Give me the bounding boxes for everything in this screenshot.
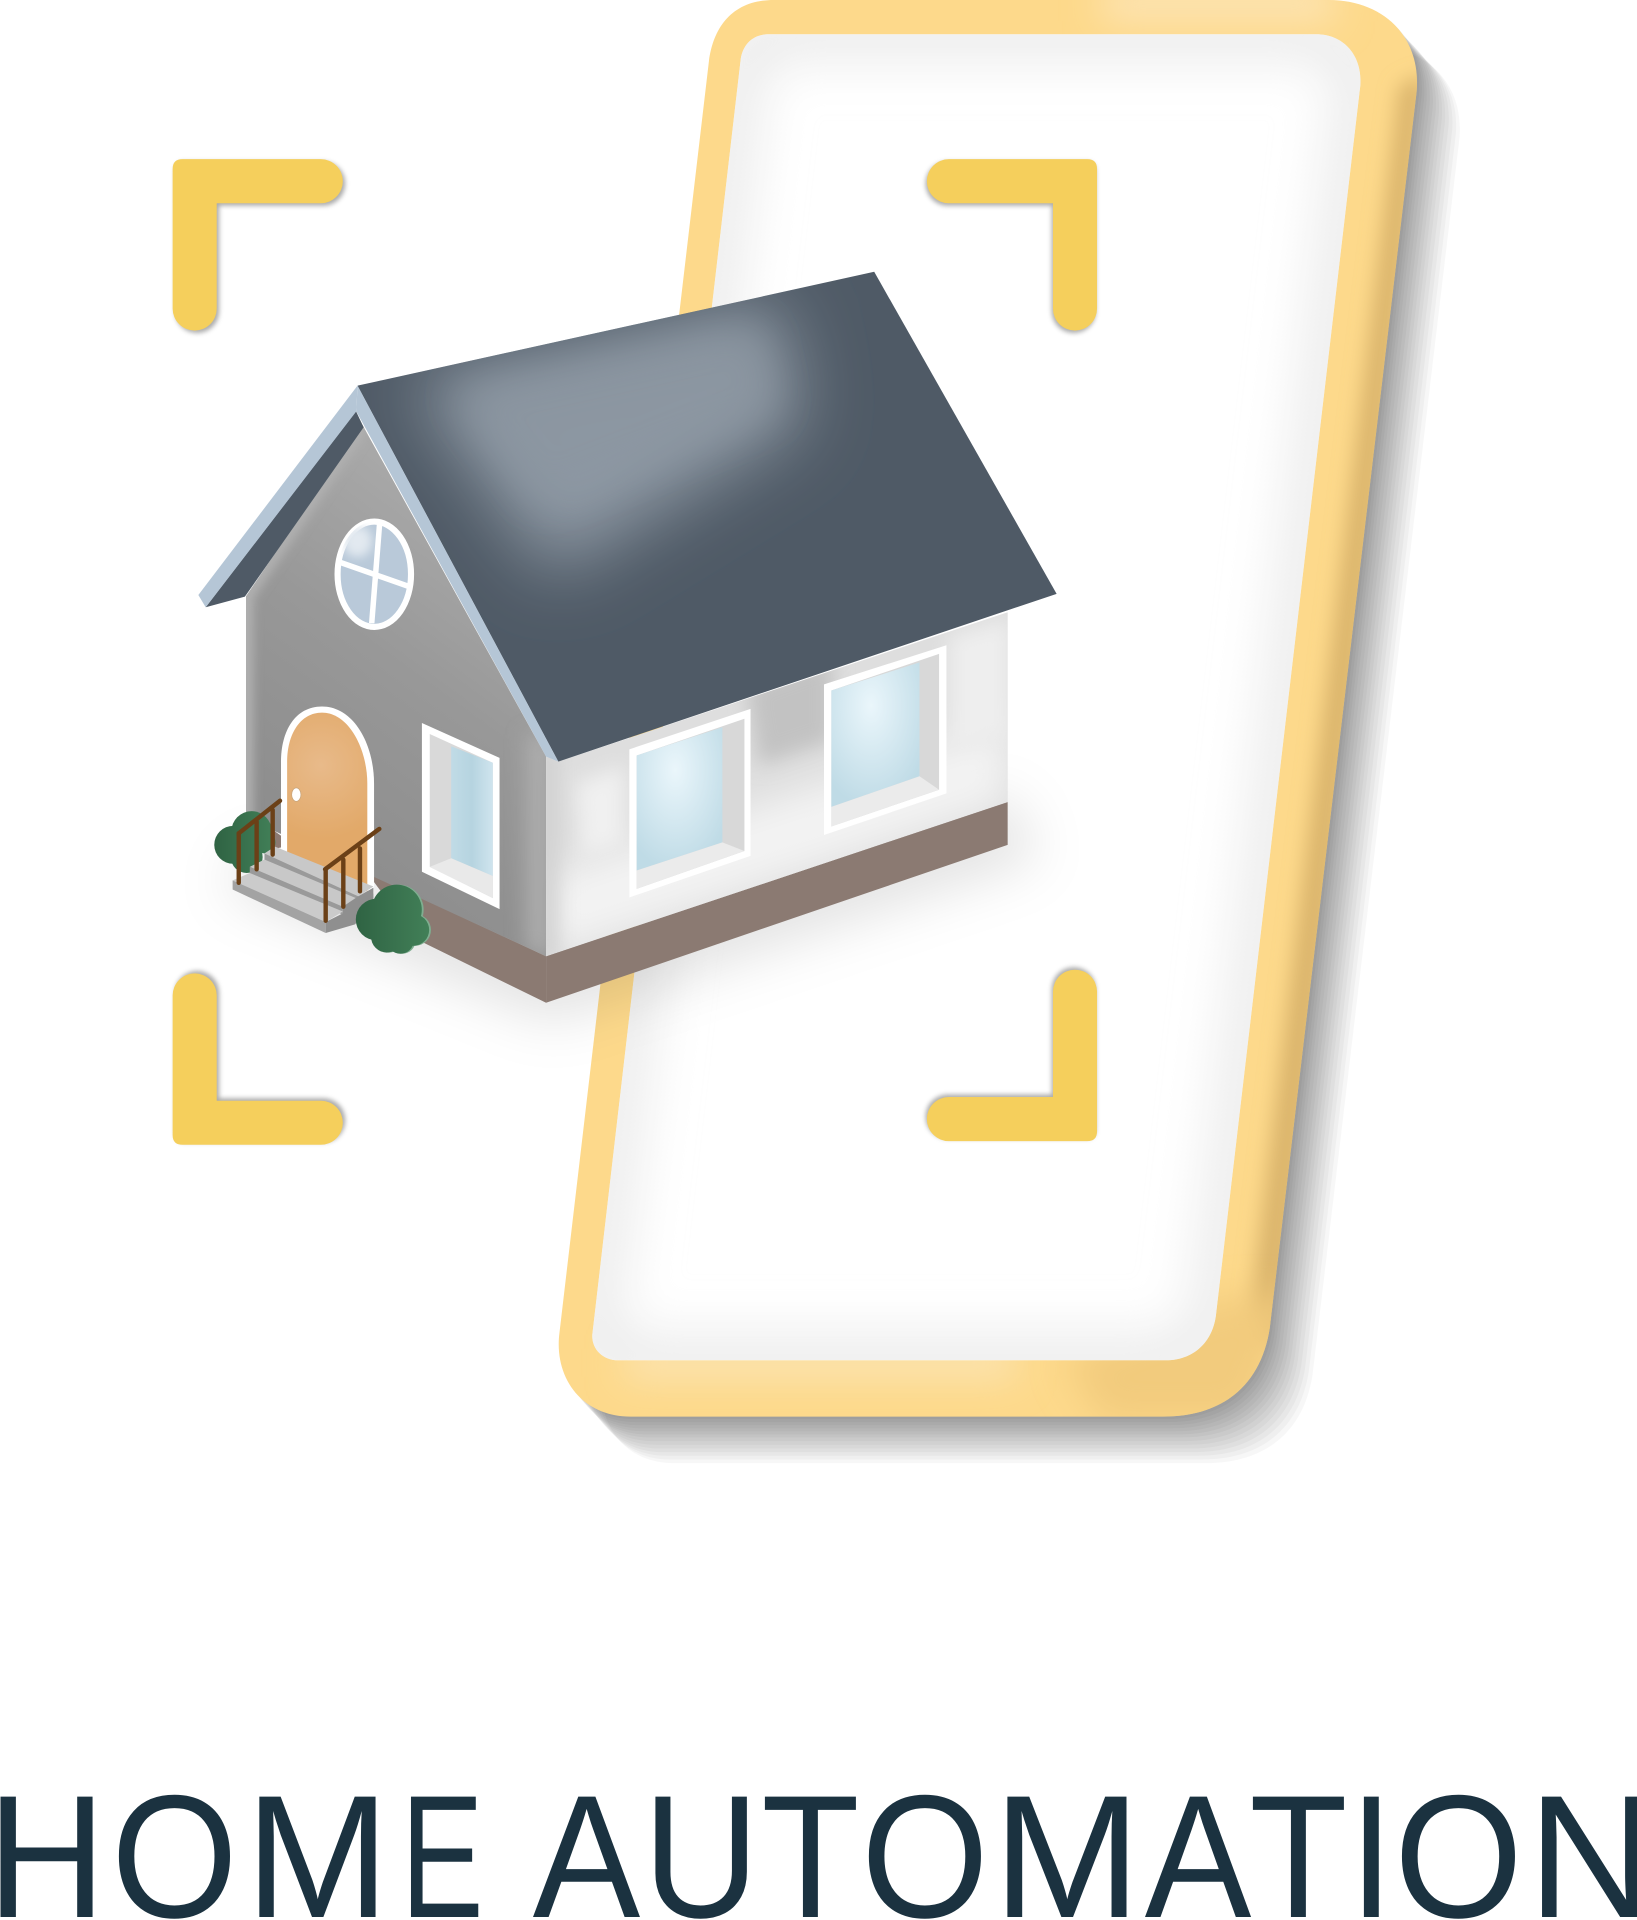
scan bracket: top right [927,159,1097,331]
side wall [539,612,1010,961]
gable wall [246,425,551,961]
phone screen [592,34,1361,1360]
gable wall window [422,723,500,909]
foundation [251,802,1008,1003]
phone frame [559,0,1426,1420]
scan bracket: bottom right [927,970,1097,1141]
phone shadow [561,2,1460,1463]
main roof [358,272,1057,762]
right bush [356,885,431,954]
right handrail [325,829,379,921]
house ground shadow [220,796,1041,1022]
side wall window 2 [824,645,946,835]
round attic window [338,522,411,627]
door [281,706,374,894]
scan bracket: bottom left [173,973,343,1145]
front steps [233,847,373,933]
left bush [214,811,275,873]
phone [559,0,1426,1420]
house [198,272,1057,1003]
door knob [292,788,301,801]
scan bracket: top left [173,159,343,331]
side wall window 1 [629,709,751,897]
left handrail [239,801,280,883]
gable eave and trim [198,386,558,762]
